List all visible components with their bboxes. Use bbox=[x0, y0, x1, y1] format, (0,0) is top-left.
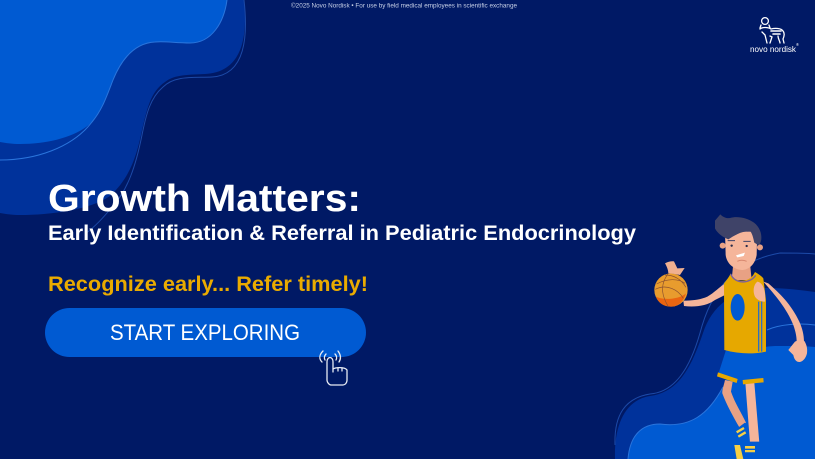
logo: novo nordisk: ® bbox=[796, 42, 799, 47]
shoulder bbox=[754, 282, 765, 302]
logo: novo nordisk bbox=[750, 18, 799, 54]
left leg bbox=[722, 380, 746, 427]
illustration: basketball player bbox=[654, 214, 807, 459]
decorative waves: top left bbox=[0, 0, 245, 234]
face bbox=[725, 232, 757, 270]
right arm bbox=[763, 282, 804, 342]
right leg bbox=[745, 383, 759, 443]
icon: bull bbox=[760, 18, 784, 43]
right hand bbox=[788, 340, 807, 362]
copyright notice: ©2025 Novo Nordisk • For use by field medical employees in scientific exchange bbox=[291, 2, 518, 10]
jersey bbox=[724, 272, 766, 353]
start button bbox=[45, 308, 366, 357]
shorts bbox=[718, 350, 764, 383]
tagline: Recognize early... Refer timely! bbox=[48, 272, 368, 296]
left arm bbox=[683, 283, 725, 306]
decorative waves: bottom right bbox=[615, 253, 815, 459]
hand on ball bbox=[665, 261, 685, 275]
ears bbox=[720, 243, 726, 249]
basketball bbox=[654, 273, 688, 307]
logo text: novo nordisk bbox=[750, 44, 797, 54]
icon: tapping hand bbox=[320, 351, 347, 385]
left shoe bbox=[735, 423, 749, 442]
subtitle: Early Identification & Referral in Pediatric Endocrinology bbox=[48, 222, 636, 245]
facial features bbox=[728, 239, 751, 243]
start button: START EXPLORING bbox=[110, 320, 300, 345]
neck bbox=[732, 263, 752, 280]
right shoe bbox=[735, 442, 763, 459]
title: Growth Matters: bbox=[48, 178, 361, 220]
hair bbox=[715, 214, 761, 245]
